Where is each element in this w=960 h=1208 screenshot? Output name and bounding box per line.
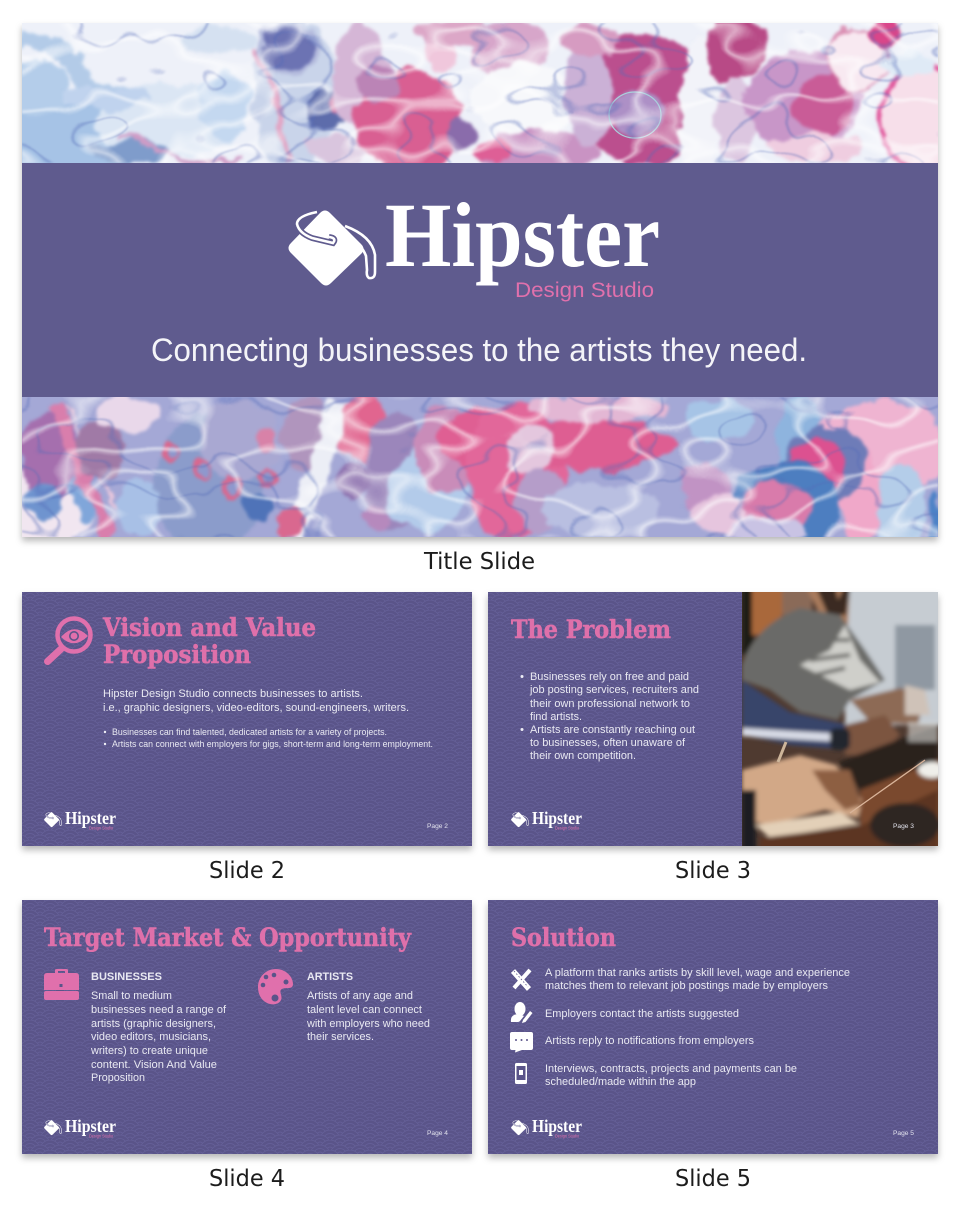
caption: slide 4: Slide 4 xyxy=(209,1166,285,1192)
footer logo xyxy=(511,808,582,830)
heading: Solution xyxy=(511,923,616,952)
artists column: ARTISTS xyxy=(307,971,353,983)
bullet list xyxy=(520,671,699,762)
icon: magnifier with eye xyxy=(48,618,90,662)
footer logo: Hipster xyxy=(65,808,116,828)
solution item 4: scheduled/made within the app xyxy=(545,1076,696,1088)
heading: Vision and Value xyxy=(102,613,316,642)
icon: smartphone xyxy=(515,1063,527,1084)
page number: Page 5 xyxy=(893,1130,914,1137)
artists column: their services. xyxy=(307,1031,374,1043)
businesses column: businesses need a range of xyxy=(91,1004,227,1016)
intro text: Hipster Design Studio connects businesses to artists. xyxy=(103,688,363,700)
caption: slide 2: Slide 2 xyxy=(209,858,285,884)
businesses column: video editors, musicians, xyxy=(91,1031,211,1043)
page number: Page 2 xyxy=(427,823,448,830)
solution item 3: Artists reply to notifications from employers xyxy=(545,1035,754,1047)
footer logo: Design Studio xyxy=(89,1134,113,1138)
footer logo: Design Studio xyxy=(89,826,113,830)
icon: ruler and pencil xyxy=(513,970,530,989)
marble image: bottom band xyxy=(22,397,938,537)
footer logo xyxy=(44,1116,116,1138)
caption: slide 3: Slide 3 xyxy=(675,858,751,884)
bullet list xyxy=(104,727,433,749)
tagline: Connecting businesses to the artists they need. xyxy=(151,332,807,368)
icon: paint bucket xyxy=(288,210,375,286)
heading: The Problem xyxy=(511,615,671,644)
solution item 1: matches them to relevant job postings made by employers xyxy=(545,980,828,992)
icon: palette xyxy=(258,969,293,1004)
footer logo: Design Studio xyxy=(555,1134,579,1138)
wordmark: Hipster xyxy=(385,184,660,286)
businesses column: BUSINESSES xyxy=(91,971,162,983)
caption: title slide: Title Slide xyxy=(423,549,535,575)
footer logo: Hipster xyxy=(65,1116,116,1136)
footer logo: Design Studio xyxy=(555,826,579,830)
caption: slide 5: Slide 5 xyxy=(675,1166,751,1192)
icon: briefcase xyxy=(44,969,79,1000)
bullet list: to businesses, often unaware of xyxy=(530,737,686,749)
panel: slide 2 xyxy=(22,592,472,846)
bullet list: find artists. xyxy=(530,711,582,723)
icon: person with pencil xyxy=(511,1002,532,1023)
bullet list: their own competition. xyxy=(530,750,636,762)
bullet list: job posting services, recruiters and xyxy=(529,684,699,696)
heading: Target Market & Opportunity xyxy=(44,923,412,952)
footer logo xyxy=(44,808,116,830)
intro text: i.e., graphic designers, video-editors, sound-engineers, writers. xyxy=(103,702,409,714)
solution item 1: A platform that ranks artists by skill level, wage and experience xyxy=(545,967,850,979)
panel: slide 3 xyxy=(488,585,946,850)
footer logo xyxy=(511,1116,582,1138)
businesses column: content. Vision And Value xyxy=(91,1059,217,1071)
bullet list: their own professional network to xyxy=(530,698,690,710)
heading: Proposition xyxy=(103,640,251,669)
artists column: with employers who need xyxy=(306,1018,430,1030)
solution item 2: Employers contact the artists suggested xyxy=(545,1008,739,1020)
tagline: design studio: Design Studio xyxy=(515,279,654,302)
businesses column: Small to medium xyxy=(91,990,172,1002)
bullet list: Artists can connect with employers for gigs, short-term and long-term employment. xyxy=(112,739,433,749)
icon: chat bubble xyxy=(510,1032,533,1052)
marble image: top band xyxy=(22,23,938,163)
bullet list: Businesses rely on free and paid xyxy=(530,671,689,683)
artists column xyxy=(306,971,430,1043)
artists column: Artists of any age and xyxy=(307,990,413,1002)
businesses column: artists (graphic designers, xyxy=(91,1018,216,1030)
panel: slide 5 xyxy=(488,900,938,1154)
businesses column: Proposition xyxy=(91,1072,145,1084)
purple band xyxy=(22,163,938,397)
logo xyxy=(288,184,660,302)
footer logo: Hipster xyxy=(532,1116,582,1136)
artists column: talent level can connect xyxy=(307,1004,422,1016)
page number: Page 3 xyxy=(893,823,914,830)
panel: title slide xyxy=(0,16,960,560)
bullet list: Businesses can find talented, dedicated artists for a variety of projects. xyxy=(112,727,387,737)
photo: people writing at a table xyxy=(742,585,946,850)
businesses column: writers) to create unique xyxy=(90,1045,208,1057)
solution item 4: Interviews, contracts, projects and payments can be xyxy=(545,1063,797,1075)
page number: Page 4 xyxy=(427,1130,448,1137)
footer logo: Hipster xyxy=(532,808,582,828)
bullet list: Artists are constantly reaching out xyxy=(530,724,695,736)
panel: slide 4 xyxy=(22,900,472,1154)
businesses column xyxy=(90,971,227,1084)
